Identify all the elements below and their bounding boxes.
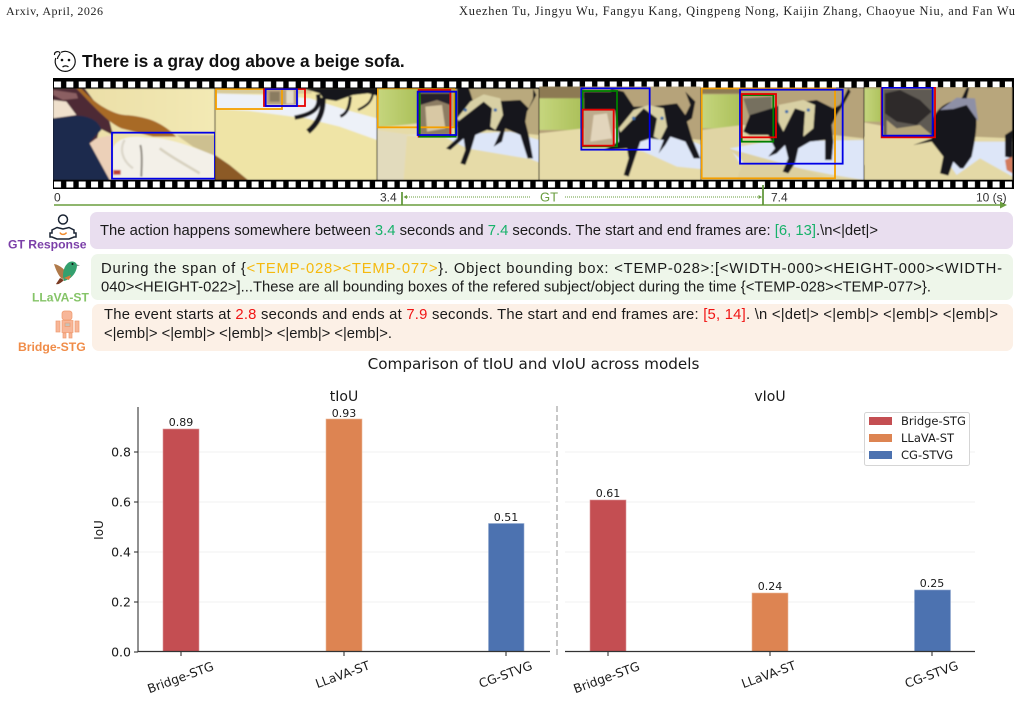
chart: tIoU: CG-STVG <box>477 659 534 691</box>
bar: Bridge-STG 0.61: 0.61 <box>596 487 620 500</box>
bar: Bridge-STG 0.61 <box>590 487 626 652</box>
label: GT Response: GT Response <box>8 238 87 252</box>
bar: LLaVA-ST 0.93 <box>326 407 362 652</box>
icon: confused face <box>54 51 75 71</box>
running header: Arxiv, April, 2026 <box>6 4 103 18</box>
panel: LLaVA-ST <box>32 254 1013 304</box>
frame 3 <box>377 88 539 180</box>
timeline <box>54 185 1007 208</box>
frame 2 <box>215 88 377 180</box>
chart: tIoU: 0.8 <box>111 444 131 460</box>
panel: GT response <box>8 212 1013 252</box>
chart: vIoU: vIoU <box>754 389 786 405</box>
timeline: GT <box>540 190 558 204</box>
chart: vIoU: CG-STVG <box>903 659 960 691</box>
chart: vIoU: Bridge-STG <box>572 659 642 696</box>
legend: CG-STVG <box>901 448 953 462</box>
chart: tIoU: LLaVA-ST <box>314 658 372 691</box>
LLaVA-ST response text <box>101 261 1002 296</box>
bar: LLaVA-ST 0.24 <box>752 580 788 652</box>
chart: tIoU: tIoU <box>330 389 358 405</box>
label: LLaVA-ST: LLaVA-ST <box>32 290 89 304</box>
bar: CG-STVG 0.25 <box>914 577 950 652</box>
chart: tIoU: Bridge-STG <box>146 659 216 696</box>
film strip with video frames <box>53 78 1014 189</box>
frame 4 <box>539 86 701 180</box>
frame 1 <box>53 88 215 180</box>
LLaVA-ST response text: 040><HEIGHT-022>]...These are all bounding boxes of the refered subject/object during the time {<TEMP-028><TEMP-077>}. <box>101 280 931 296</box>
icon: robot <box>56 311 79 338</box>
panel: Bridge-STG <box>18 304 1013 354</box>
legend <box>864 412 970 466</box>
chart: tIoU: 0.4 <box>111 544 131 560</box>
Bridge-STG response text: The event starts at 2.8 seconds and ends at 7.9 seconds. The start and end frames are: [5, 14]. \n <|det|> <|emb|> <|emb|> <|emb|> <box>104 307 998 323</box>
bar: CG-STVG 0.51: 0.51 <box>494 511 518 524</box>
chart title: Comparison of tIoU and vIoU across models <box>368 355 699 373</box>
query text: There is a gray dog above a beige sofa. <box>82 51 405 71</box>
icon: GT person <box>50 215 76 239</box>
label: Bridge-STG: Bridge-STG <box>18 340 86 354</box>
legend: LLaVA-ST <box>901 431 955 445</box>
chart: vIoU <box>565 389 975 696</box>
bar: Bridge-STG 0.89 <box>163 416 199 652</box>
icon: hummingbird <box>54 261 80 284</box>
timeline: 10 (s) <box>976 190 1007 204</box>
chart: tIoU: 0.6 <box>111 494 131 510</box>
bar: CG-STVG 0.25: 0.25 <box>920 577 944 590</box>
chart: tIoU: IoU <box>92 520 106 540</box>
chart: tIoU: 0.2 <box>111 594 131 610</box>
running header: Xuezhen Tu, Jingyu Wu, Fangyu Kang, Qingpeng Nong, Kaijin Zhang, Chaoyue Niu, and Fan Wu <box>459 4 1015 18</box>
Bridge-STG response text: <|emb|> <|emb|> <|emb|> <|emb|> <|emb|>. <box>104 326 392 342</box>
chart: tIoU <box>92 389 550 696</box>
timeline: 3.4 <box>380 190 397 204</box>
timeline: 0 <box>54 190 61 204</box>
bar: CG-STVG 0.51 <box>488 511 524 652</box>
LLaVA-ST response text: During the span of {<TEMP-028><TEMP-077>}. Object bounding box: <TEMP-028>:[<WIDTH-000><HEIGHT-000><WIDTH- <box>101 261 1002 277</box>
query title with confused face icon <box>54 51 405 71</box>
frame 6 <box>860 87 1013 180</box>
timeline: 7.4 <box>771 190 788 204</box>
bar: LLaVA-ST 0.93: 0.93 <box>332 407 356 420</box>
bar: LLaVA-ST 0.24: 0.24 <box>758 580 782 593</box>
Bridge-STG response text <box>104 307 998 342</box>
chart: vIoU: LLaVA-ST <box>740 658 798 691</box>
chart: tIoU: 0.0 <box>111 644 131 660</box>
running header <box>6 4 1015 18</box>
bar: Bridge-STG 0.89: 0.89 <box>169 416 193 429</box>
GT response text: The action happens somewhere between 3.4 seconds and 7.4 seconds. The start and end frames are: [6, 13].\n<|det|> <box>100 223 878 239</box>
frame 5 <box>701 88 864 180</box>
legend: Bridge-STG <box>901 414 966 428</box>
